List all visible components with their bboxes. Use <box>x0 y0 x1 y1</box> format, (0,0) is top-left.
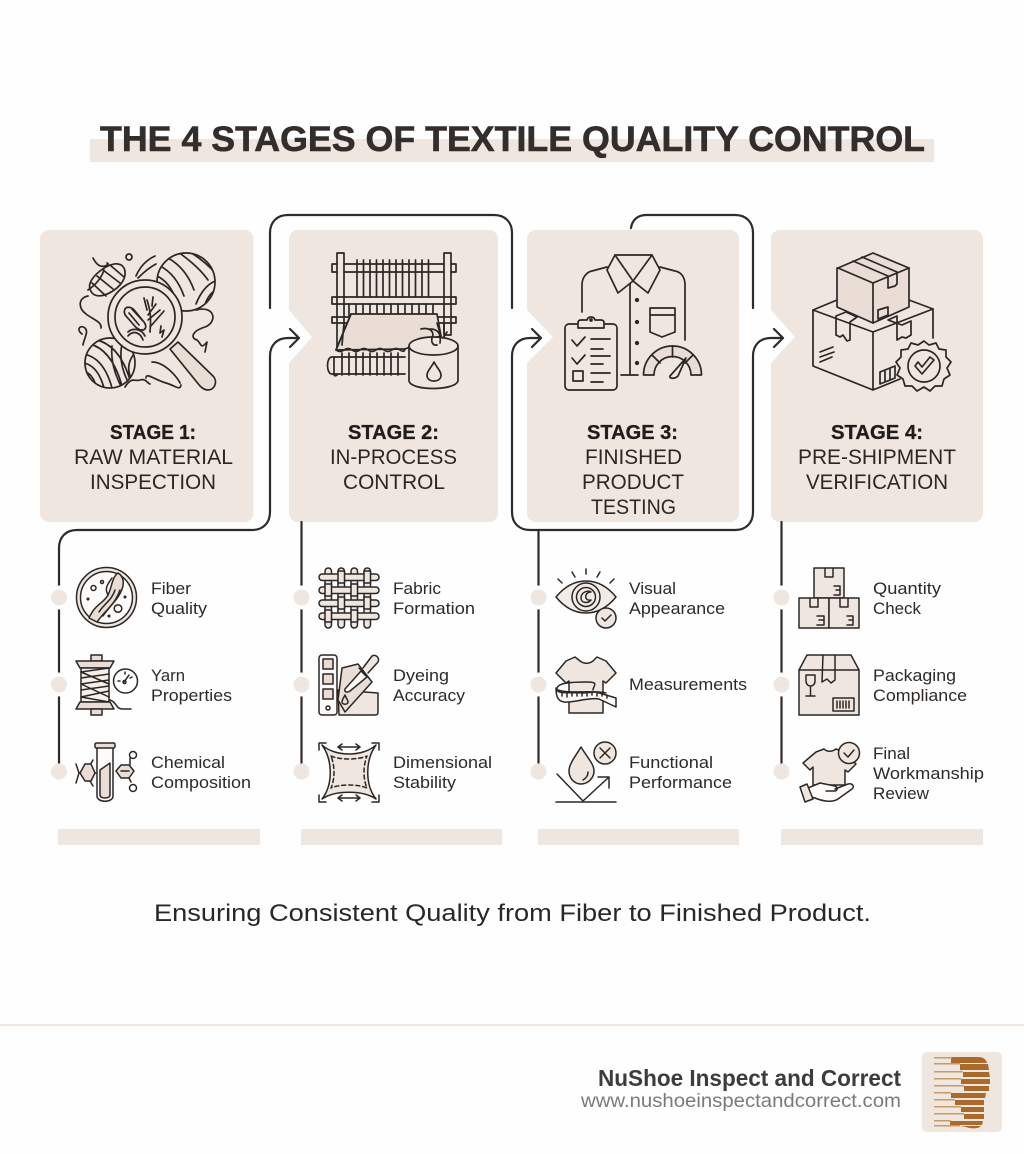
connector: stage 2 to stage 3 and stage 3 to stage 4 <box>512 329 783 530</box>
label: dyeing accuracy: Dyeing <box>393 667 449 685</box>
stage 1 label: STAGE 1: <box>110 422 196 444</box>
icon: packaging compliance <box>799 655 859 715</box>
connector: stage 1 to stage 2 <box>59 329 299 763</box>
connector: over stage 3 <box>631 215 753 308</box>
panel: stage 1 <box>40 230 254 522</box>
icon: final workmanship review <box>800 742 860 802</box>
icon: yarn balls and magnifier <box>79 252 222 390</box>
panel: stage 3 <box>527 230 739 522</box>
footer brand text: NuShoe Inspect and Correct <box>598 1065 901 1091</box>
icon: quantity check <box>799 568 859 628</box>
stage 4 label: STAGE 4: <box>831 422 923 444</box>
icon: shirt, checklist, gauge <box>565 255 702 390</box>
label: functional performance <box>629 754 732 792</box>
label: fabric formation <box>393 580 475 618</box>
label: chemical composition: Composition <box>151 774 251 792</box>
label: measurements: Measurements <box>629 676 747 694</box>
footer logo <box>922 1052 1002 1132</box>
stage 1 label: RAW MATERIAL <box>74 446 233 469</box>
stage 2 label: CONTROL <box>343 471 445 494</box>
label: yarn properties <box>151 667 232 705</box>
label: final workmanship review: Workmanship <box>873 765 984 783</box>
panel: stage 2 <box>289 230 498 522</box>
bottom bars <box>58 829 983 845</box>
label: packaging compliance: Packaging <box>873 667 956 685</box>
label: fabric formation: Formation <box>393 600 475 618</box>
label: packaging compliance <box>873 667 967 705</box>
icon: chemical composition <box>76 743 136 801</box>
timeline dots <box>47 586 794 780</box>
label: dimensional stability: Stability <box>393 774 457 792</box>
label: chemical composition <box>151 754 251 792</box>
stage 3 label: FINISHED <box>585 446 682 469</box>
icon: fiber quality <box>76 568 136 628</box>
stage 3 label: TESTING <box>591 496 676 519</box>
label: quantity check: Check <box>873 600 922 618</box>
label: visual appearance <box>629 580 725 618</box>
connector: over stage 2 <box>270 215 512 308</box>
label: visual appearance: Visual <box>629 580 676 598</box>
icon: dyeing accuracy <box>319 655 379 715</box>
label: chemical composition: Chemical <box>151 754 225 772</box>
label: functional performance: Functional <box>629 754 713 772</box>
label: yarn properties: Yarn <box>151 667 185 685</box>
stage 2 label <box>330 422 457 494</box>
icon: yarn properties <box>76 655 138 715</box>
stage 4 label: VERIFICATION <box>806 471 948 494</box>
stage 2 label: STAGE 2: <box>348 422 439 444</box>
label: dyeing accuracy <box>393 667 466 705</box>
icon: fabric formation <box>319 568 379 628</box>
timeline: stage 3 <box>537 530 540 763</box>
icon: functional performance <box>556 742 616 802</box>
title: THE 4 STAGES OF TEXTILE QUALITY CONTROL <box>100 120 925 159</box>
label: fiber quality: Fiber <box>151 580 192 598</box>
timeline: stage 4 <box>780 522 783 763</box>
label: yarn properties: Properties <box>151 687 232 705</box>
stage 3 label: PRODUCT <box>582 471 684 494</box>
stage 3 label: STAGE 3: <box>587 422 678 444</box>
label: quantity check <box>873 580 942 618</box>
label: dimensional stability: Dimensional <box>393 754 492 772</box>
label: packaging compliance: Compliance <box>873 687 967 705</box>
stage 1 label: INSPECTION <box>90 471 216 494</box>
label: dimensional stability <box>393 754 492 792</box>
icon: dimensional stability <box>319 743 379 802</box>
icon: loom and dye pot <box>328 253 458 388</box>
label: final workmanship review: Final <box>873 745 910 763</box>
icon: visual appearance <box>556 569 616 628</box>
footer brand text: www.nushoeinspectandcorrect.com <box>580 1090 901 1112</box>
stage 2 label: IN-PROCESS <box>330 446 457 469</box>
caption: Ensuring Consistent Quality from Fiber to Finished Product. <box>154 900 871 927</box>
label: visual appearance: Appearance <box>629 600 725 618</box>
panel: stage 4 <box>771 230 983 522</box>
timeline: stage 2 <box>300 522 303 763</box>
icon: measurements <box>556 657 616 713</box>
stage 1 label <box>74 422 233 494</box>
stage 4 label <box>798 422 956 494</box>
label: final workmanship review: Review <box>873 785 929 803</box>
label: quantity check: Quantity <box>873 580 942 598</box>
label: dyeing accuracy: Accuracy <box>393 687 466 705</box>
label: functional performance: Performance <box>629 774 732 792</box>
label: fiber quality <box>151 580 208 618</box>
footer brand text <box>580 1065 901 1112</box>
icon: stacked boxes and seal <box>813 253 951 391</box>
label: final workmanship review <box>873 745 984 803</box>
label: fabric formation: Fabric <box>393 580 441 598</box>
stage 4 label: PRE-SHIPMENT <box>798 446 956 469</box>
label: fiber quality: Quality <box>151 600 208 618</box>
stage 3 label <box>582 422 684 519</box>
